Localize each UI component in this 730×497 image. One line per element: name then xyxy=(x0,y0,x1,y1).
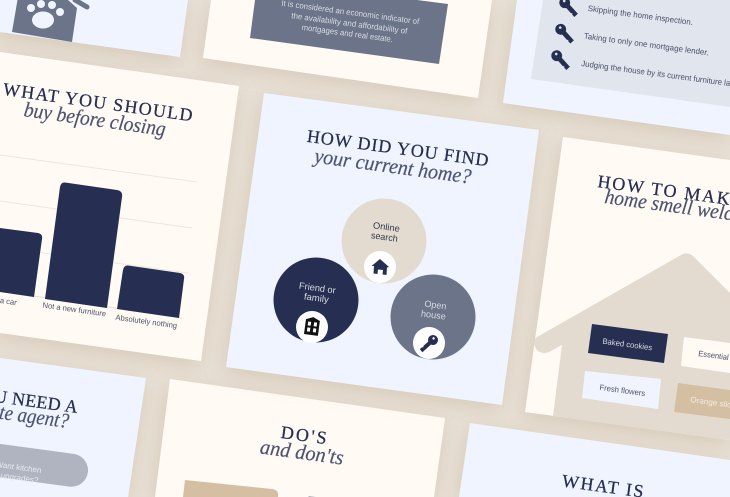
icon: key three xyxy=(549,48,572,72)
text: mistake list: Skipping the home inspection. xyxy=(587,4,693,27)
chart labels xyxy=(0,296,178,330)
label box: essential oils xyxy=(681,337,730,373)
circle: friend or family: Friend or xyxy=(298,281,336,295)
panel: economic indicator card xyxy=(203,0,492,98)
text box: economic indicator: mortgages and real estate. xyxy=(301,23,394,44)
panel: what is xyxy=(459,423,730,497)
text box: economic indicator xyxy=(250,0,448,64)
circle: online search xyxy=(342,198,426,284)
chart labels: Not a new furniture xyxy=(42,301,107,318)
circle: friend or family xyxy=(274,258,358,343)
heading: how did you find: HOW DID YOU FIND xyxy=(306,126,490,170)
icon: house xyxy=(372,259,389,275)
box: don'ts column xyxy=(308,496,316,497)
circle: online search: Online xyxy=(372,220,400,234)
label box: fresh flowers: Fresh flowers xyxy=(599,383,646,398)
illustration: house silhouette xyxy=(534,253,730,440)
circle: open house xyxy=(390,274,476,360)
circle: open house: Open xyxy=(424,299,447,311)
text: mistake list xyxy=(581,4,730,90)
label box: baked cookies xyxy=(588,324,668,363)
icon: key two xyxy=(553,22,576,46)
panel: do you need a real estate agent xyxy=(0,358,146,497)
icon: house with paw xyxy=(12,0,87,42)
subheading: and don'ts: and don'ts xyxy=(259,435,345,470)
pill: kitchen upgrades xyxy=(0,436,90,489)
label box: fresh flowers xyxy=(582,371,661,409)
pill: kitchen upgrades: upgrades? xyxy=(0,471,39,485)
panel: what to buy before closing xyxy=(0,52,239,361)
text box: economic indicator: the availability and affordability of xyxy=(291,11,409,36)
text: mistake list: Taking to only one mortgage lender. xyxy=(583,32,709,57)
subheading: your current home: your current home? xyxy=(311,143,473,189)
heading: what you should: WHAT YOU SHOULD xyxy=(2,79,194,125)
icon: key xyxy=(418,333,440,354)
panel: do's and don'ts xyxy=(155,379,445,497)
circle: open house: house xyxy=(420,308,446,322)
box: do's column xyxy=(183,480,278,497)
panel: paw house card xyxy=(0,0,188,57)
circle: friend or family: family xyxy=(303,291,330,305)
chart labels: Absolutely nothing xyxy=(115,313,178,330)
heading: do's: DO'S xyxy=(280,422,328,448)
panel: how did you find your current home xyxy=(226,93,539,405)
circle: online search: search xyxy=(370,230,398,244)
label box: orange slices xyxy=(674,383,730,419)
bar chart xyxy=(0,155,197,330)
label box: baked cookies: Baked cookies xyxy=(602,337,653,352)
icon: key one xyxy=(557,0,580,19)
icon: building xyxy=(304,316,320,336)
panel: home buying mistakes card xyxy=(503,0,730,135)
panel: how to make home smell welcoming xyxy=(525,137,730,440)
subheading: buy before closing: buy before closing xyxy=(22,97,167,141)
